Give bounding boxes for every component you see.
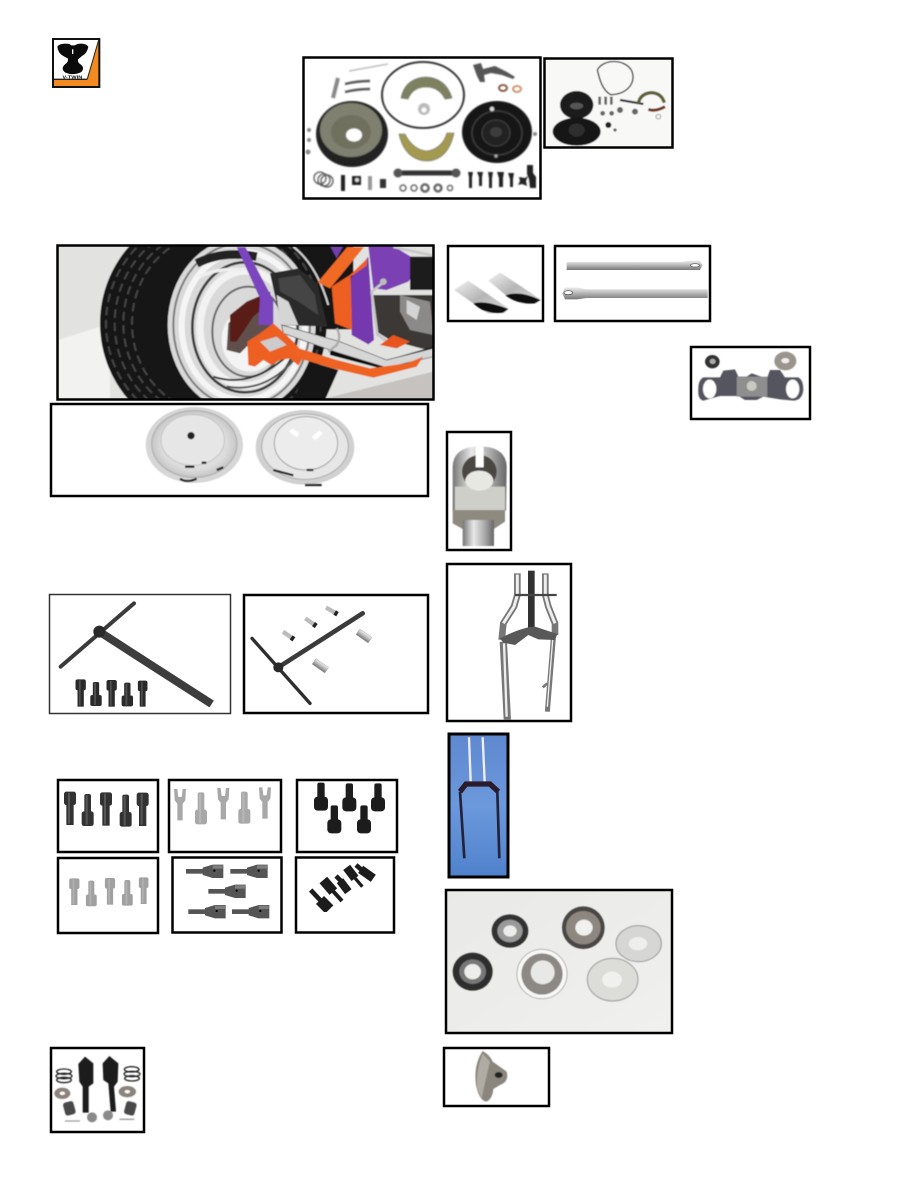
panel: black fork on blue background [449, 734, 508, 877]
washers row [400, 184, 453, 192]
clear cup front [587, 958, 638, 1001]
panel: rocker lug [444, 1048, 549, 1106]
icon: engine silhouette [57, 44, 88, 74]
right tip [488, 272, 541, 303]
threaded stem [463, 520, 494, 546]
upper drum [560, 91, 593, 119]
brake line [370, 282, 387, 342]
engine [373, 295, 433, 352]
orange upper bar [318, 247, 364, 288]
small hardware left [314, 172, 333, 187]
right hub cap [256, 410, 354, 485]
right stud [103, 1056, 118, 1112]
chrome hub [166, 246, 316, 398]
fender strut [270, 268, 327, 327]
top right chrome and shadow [393, 247, 433, 256]
upper brake shoe [401, 77, 452, 99]
block body [453, 447, 507, 511]
panel: black fork bolts [58, 780, 158, 852]
lug part [475, 1051, 507, 1102]
exhaust pipe [282, 325, 433, 368]
engine highlight [72, 49, 73, 54]
castle nuts [87, 1112, 97, 1122]
panel: T-handle wrench with black bolts [50, 594, 230, 714]
washers [54, 1088, 70, 1099]
panel: angled black bolts [296, 858, 394, 932]
photo border [58, 246, 434, 400]
panel: chrome socket bolts [58, 858, 158, 933]
left brake drum [316, 101, 388, 167]
panel: chrome springer fork [447, 564, 571, 721]
small kit border [544, 58, 672, 148]
orange lever [293, 347, 423, 378]
bolts hardware [598, 97, 638, 132]
panel: motorcycle wheel photo [56, 244, 435, 401]
purple column [351, 257, 374, 344]
brake lever [473, 63, 515, 82]
panel: brake kit parts layout [304, 58, 540, 198]
rear tire [99, 246, 328, 398]
lower brake shoe [399, 133, 454, 161]
bearing front [453, 953, 493, 991]
bearing back [492, 914, 528, 948]
right bolts row [468, 165, 536, 188]
cable [597, 61, 633, 95]
lower rod [562, 287, 708, 299]
panel: chrome fork bolts [169, 780, 281, 852]
panel: studs, springs and nuts kit [51, 1048, 144, 1132]
panel: top clamp with nut and washer [691, 347, 810, 419]
washer [774, 352, 796, 370]
dark exhaust shadow [329, 346, 432, 368]
T-handle [61, 603, 134, 667]
bar and brake shoe [620, 100, 643, 104]
tire behind pipe [293, 362, 338, 400]
white tubes [469, 737, 485, 782]
logo: V-Twin engine badge [53, 39, 99, 87]
cable loop [382, 62, 464, 128]
bushings [62, 1101, 76, 1116]
orange foot bracket [247, 323, 305, 367]
upper rod [567, 261, 702, 270]
fork crown [500, 627, 557, 645]
right brake backing plate [462, 101, 532, 163]
chrome cup front [517, 949, 567, 999]
fork legs [502, 573, 555, 720]
panel: fork rods [555, 246, 710, 321]
background wall and floor [58, 246, 433, 399]
panel: black socket screws [297, 780, 397, 852]
seal rings [499, 85, 507, 91]
dark cup back [562, 906, 605, 949]
linkage bar [398, 170, 456, 176]
black crown and legs [460, 784, 498, 792]
panel: T-handle wrench with chrome bolts [244, 595, 428, 713]
orange column [332, 258, 367, 330]
purple frame top [330, 246, 343, 258]
lower drum [553, 118, 601, 146]
black bolts [76, 679, 147, 707]
panel: fork clamp block [447, 432, 511, 550]
left stud [78, 1057, 93, 1113]
springs [56, 1067, 140, 1083]
orange bracket on engine [380, 335, 410, 348]
bore [462, 455, 497, 488]
nut [705, 355, 720, 368]
clamp plate [698, 369, 803, 401]
springs and lever pin [333, 78, 338, 98]
clear cup back [616, 926, 661, 962]
panel: neck bearings and cups [446, 890, 672, 1033]
purple strut [237, 247, 273, 325]
thin cable end [349, 64, 388, 71]
panel: brake kit assembled group [544, 58, 673, 148]
logo wordmark: V-TWIN [62, 74, 83, 79]
clamp [328, 328, 339, 352]
panel: exhaust tips [448, 246, 543, 321]
panel: chrome hub caps [51, 404, 428, 496]
cotter pins [65, 1119, 134, 1121]
left tip [454, 281, 508, 313]
chrome rim edge [293, 247, 328, 305]
chrome bolts [282, 605, 372, 673]
dark red bracket [230, 292, 272, 342]
steering stem [528, 571, 535, 631]
panel: horizontal cross-drilled bolts [172, 858, 282, 932]
T-handle [252, 638, 310, 703]
left hub cap [146, 407, 243, 483]
